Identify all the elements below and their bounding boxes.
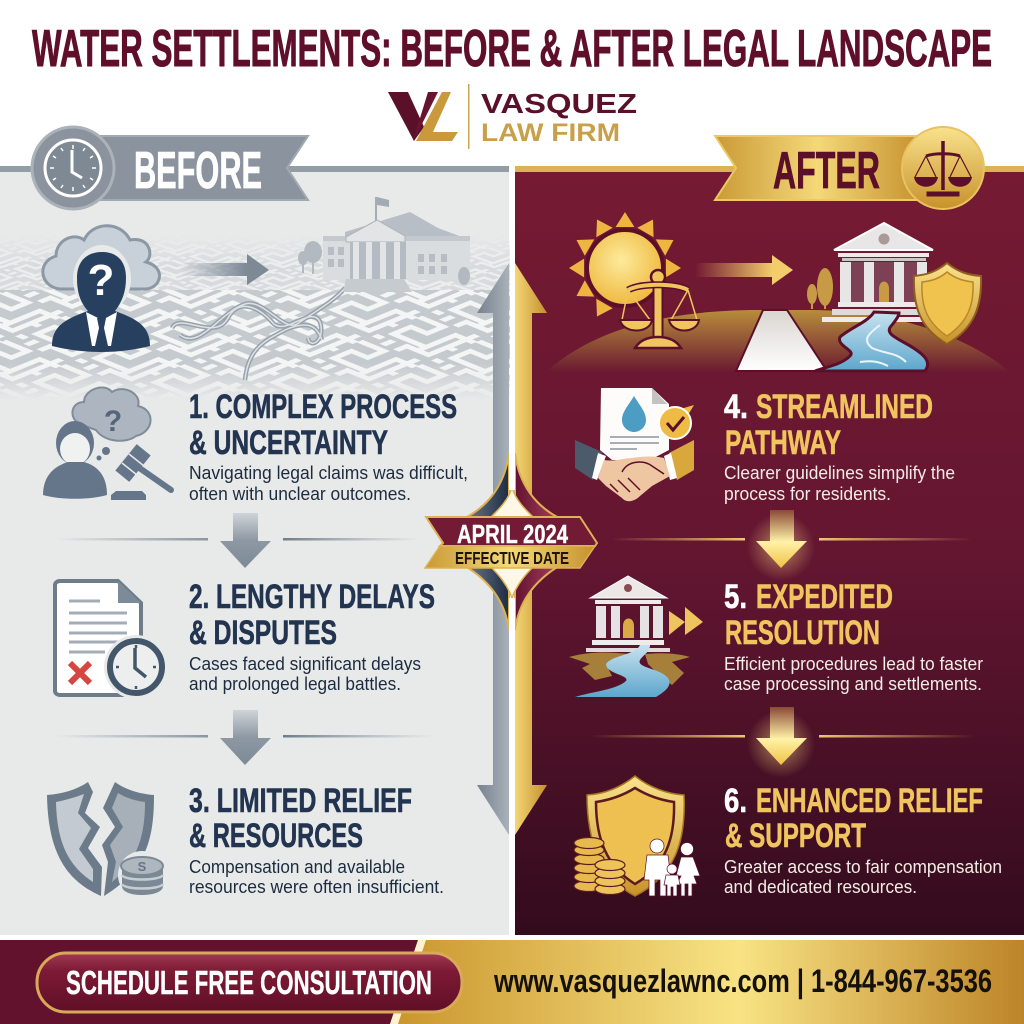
footer slant stripe [390,940,426,1024]
heading: STREAMLINED [756,388,933,426]
pediment [834,223,933,250]
arrow: step 2 to 3 [55,710,435,765]
description [189,857,444,897]
heading: & RESOURCES [189,817,363,855]
heading [189,782,412,855]
steps [343,279,412,292]
arrow: step 5 to 6 [590,707,975,778]
person [52,252,150,352]
icon: scales [914,141,972,196]
step 2: lengthy delays [55,578,435,699]
logo wordmark: LAW FIRM [481,119,620,147]
icon: courthouse, double arrow and river [569,576,703,697]
scales badge circle [902,127,984,209]
button: schedule free consultation: SCHEDULE FREE CONSULTATION [66,964,432,1001]
centre divider [509,440,515,490]
heading [724,782,983,855]
star: right top [515,453,559,518]
star: white centre [490,488,534,598]
description: Navigating legal claims was difficult, [189,463,468,483]
clock badge circle [32,127,114,209]
step 5: expedited resolution [569,576,983,697]
icon: broken shield and coins [47,782,166,899]
roof [345,212,470,240]
description [724,654,983,694]
heading: 3. LIMITED RELIEF [189,782,412,820]
columns [840,262,927,302]
tie [95,318,108,346]
date ribbon: APRIL 2024 [457,519,568,549]
heading: 2. LENGTHY DELAYS [189,578,435,616]
cloud [43,226,159,289]
heading: RESOLUTION [725,614,880,652]
star: right bottom [515,566,559,630]
description: Compensation and available [189,857,405,877]
description: and prolonged legal battles. [189,674,401,694]
icon: person, thought cloud and gavel: ? [104,405,122,438]
effective date emblem [425,440,597,648]
base [838,302,934,307]
icon: document with X and clock [55,581,168,699]
hill [546,310,1010,372]
trees [807,268,833,309]
footer [0,940,1024,1024]
description: process for residents. [724,484,891,504]
icon: document, check badge and handshake [575,388,694,501]
heading: & SUPPORT [725,817,866,855]
arrow: step 1 to 2 [55,513,420,568]
description [189,463,468,504]
logo: Vasquez Law Firm [388,84,637,149]
ribbon [715,136,920,200]
icon: white courthouse, trees, river and shield [807,223,981,371]
door [879,282,889,303]
button: schedule free consultation [37,953,462,1012]
heading [189,578,435,652]
back wall [848,262,922,302]
arrow: step 4 to 5 [611,510,972,581]
before top rule [0,166,509,172]
heading: after: AFTER [773,142,880,200]
portico [346,220,405,242]
heading: & UNCERTAINTY [189,424,388,462]
step 1: complex process [43,387,468,504]
heading: 6. [724,782,747,820]
star: left bottom [465,566,509,630]
footer maroon band [0,940,418,1024]
logo wordmark: VASQUEZ [481,88,637,119]
description [189,654,421,694]
heading [189,388,457,462]
description: case processing and settlements. [724,674,982,694]
icon: sun and golden scales [546,212,1010,372]
collar [86,312,117,346]
icon: grey courthouse [298,197,470,292]
tangled paths across the maze [172,288,345,380]
description [724,857,1002,897]
description: Cases faced significant delays [189,654,421,674]
entablature [838,253,929,257]
icon: person under a cloud of uncertainty [43,226,159,352]
after panel background [515,170,1024,935]
question mark: ? [88,256,114,305]
description: and dedicated resources. [724,877,917,897]
icon: clock [45,140,101,196]
centre divider lower [509,598,515,648]
arrow: grey up and down [477,263,509,835]
heading: EXPEDITED [756,578,893,616]
description [724,463,955,504]
before panel background [0,170,509,935]
wings [323,238,470,280]
icon: gold shield, coins and family [574,776,700,896]
river [815,312,928,371]
arrow: gold up and down [515,263,547,835]
shield inner [922,272,973,336]
ribbon [100,136,308,200]
date ribbon: EFFECTIVE DATE [455,548,569,568]
flag [375,197,377,222]
badge: before [32,127,308,209]
heading [724,388,933,462]
heading: & DISPUTES [189,614,337,652]
scales [620,270,699,348]
logo wordmark [481,88,637,147]
shield [914,263,981,344]
logo mark: VL monogram [388,92,458,141]
icon: road [736,310,827,371]
icon: broken shield and coins: S [138,859,147,874]
description: Clearer guidelines simplify the [724,463,955,483]
description: Efficient procedures lead to faster [724,654,983,674]
person outline [73,245,131,313]
step 4: streamlined pathway [575,388,955,504]
panel: after [515,127,1024,935]
sun rays [569,212,681,316]
date ribbon [425,517,597,568]
step 3: limited relief [47,782,444,899]
arrow: person to courthouse [180,254,269,285]
heading: 1. COMPLEX PROCESS [189,388,457,426]
description: resources were often insufficient. [189,877,444,897]
heading: before: BEFORE [134,142,262,200]
heading: 4. [724,388,748,426]
description: often with unclear outcomes. [189,484,411,504]
panel: before [0,127,510,935]
heading: 5. [724,578,747,616]
after top rule [515,166,1024,172]
star: left top [465,453,509,518]
heading [724,578,893,652]
sun [587,230,663,306]
river highlights [860,325,906,366]
heading: PATHWAY [725,424,841,462]
before maze background [0,235,510,400]
footer gold band [390,940,1024,1024]
description: Greater access to fair compensation [724,857,1002,877]
trees [298,241,470,285]
badge: after [715,127,984,209]
icon: person, thought cloud and gavel [43,387,171,500]
step 6: enhanced relief [574,776,1002,897]
logo divider [468,84,470,149]
arrow: sun to courthouse [695,255,793,285]
windows [328,247,447,274]
